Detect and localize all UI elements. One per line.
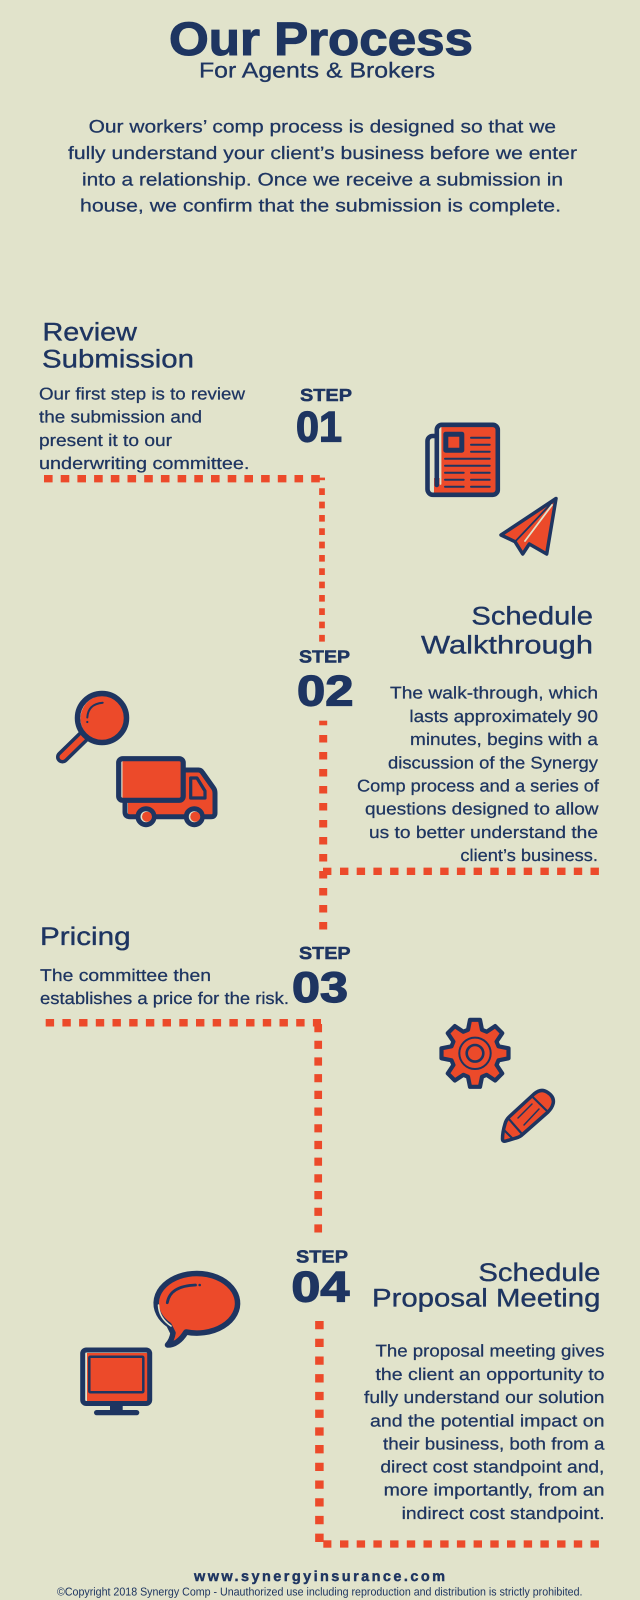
step label 04: STEP (296, 1247, 348, 1267)
heading: review submission: Review (42, 319, 138, 347)
panel: step 3 pricing (40, 923, 553, 1232)
heading: schedule proposal meeting (372, 1259, 600, 1313)
icon: delivery truck (119, 759, 215, 825)
heading: review submission (42, 319, 194, 374)
step label 03: 03 (292, 964, 348, 1012)
step label 04: 04 (291, 1264, 349, 1312)
body text: step 1: underwriting committee. (39, 454, 249, 473)
icon: gear (442, 1020, 508, 1087)
body text: step 4: The proposal meeting gives (376, 1342, 604, 1361)
intro text block: fully understand your client’s business before we enter (68, 143, 577, 163)
heading: schedule walkthrough: Walkthrough (421, 631, 593, 659)
heading: schedule proposal meeting: Proposal Meeting (372, 1285, 600, 1313)
body text: step 2: lasts approximately 90 (409, 707, 598, 726)
dotted connector 2 (319, 721, 599, 930)
step label 02: STEP (299, 647, 350, 667)
panel: step 2 schedule walkthrough (62, 603, 599, 930)
intro text block: house, we confirm that the submission is complete. (80, 196, 561, 216)
body text: step 1 (39, 384, 249, 473)
heading: schedule proposal meeting: Schedule (478, 1259, 600, 1287)
body text: step 2 (357, 684, 599, 865)
step label 01: STEP (300, 385, 352, 405)
step label 02: 02 (297, 667, 354, 715)
intro text block: into a relationship. Once we receive a submission in (82, 169, 563, 189)
body text: step 1: present it to our (39, 431, 172, 450)
subtitle: For Agents & Brokers (199, 58, 435, 82)
body text: step 4: the client an opportunity to (376, 1365, 604, 1384)
heading: pricing: Pricing (40, 923, 131, 951)
body text: step 4: fully understand our solution (364, 1388, 604, 1407)
icon: computer monitor (83, 1350, 150, 1415)
body text: step 2: questions designed to allow (365, 800, 599, 819)
body text: step 2: minutes, begins with a (410, 730, 599, 749)
dotted connector 1 (44, 478, 325, 642)
body text: step 2: Comp process and a series of (357, 777, 599, 796)
body text: step 1: Our first step is to review (39, 384, 246, 403)
heading: schedule walkthrough: Schedule (471, 603, 593, 631)
body text: step 2: client’s business. (460, 846, 598, 865)
footer: copyright: ©Copyright 2018 Synergy Comp - Unauthorized use including reproduction and distribution is strictly prohibited. (57, 1587, 582, 1599)
body text: step 1: the submission and (39, 408, 202, 427)
body text: step 2: The walk-through, which (390, 684, 598, 703)
step label 02 (297, 647, 354, 715)
step label 04 (291, 1247, 349, 1312)
dotted connector 4 (319, 1321, 599, 1548)
icon: pencil (502, 1090, 553, 1141)
heading: review submission: Submission (42, 346, 194, 374)
heading: schedule walkthrough (421, 603, 593, 659)
icon: speech bubble (156, 1273, 238, 1345)
body text: step 4: more importantly, from an (384, 1481, 604, 1500)
panel: step 1 review submission (39, 319, 556, 642)
body text: step 4: direct cost standpoint and, (380, 1458, 604, 1477)
body text: step 4: indirect cost standpoint. (402, 1504, 605, 1523)
body text: step 2: us to better understand the (369, 823, 598, 842)
dotted connector 3 (46, 1023, 321, 1232)
body text: step 3 (40, 966, 289, 1008)
icon: paper plane (501, 498, 556, 554)
step label 01: 01 (296, 403, 342, 451)
icon: magnifying glass (62, 694, 126, 757)
body text: step 4: their business, both from a (383, 1434, 605, 1453)
body text: step 2: discussion of the Synergy (388, 753, 599, 772)
body text: step 3: establishes a price for the risk. (40, 989, 289, 1008)
step label 03: STEP (299, 943, 351, 963)
body text: step 4: and the potential impact on (370, 1411, 604, 1430)
icon: newspaper (428, 425, 498, 495)
step label 03 (292, 943, 351, 1012)
footer: website: www.synergyinsurance.com (193, 1569, 445, 1585)
title: Our Process (169, 12, 473, 65)
step label 01 (296, 385, 352, 451)
panel: step 4 schedule proposal meeting (83, 1247, 605, 1548)
body text: step 4 (364, 1342, 605, 1523)
intro text block: Our workers’ comp process is designed so that we (89, 117, 556, 137)
body text: step 3: The committee then (40, 966, 211, 985)
intro text block (68, 117, 577, 216)
